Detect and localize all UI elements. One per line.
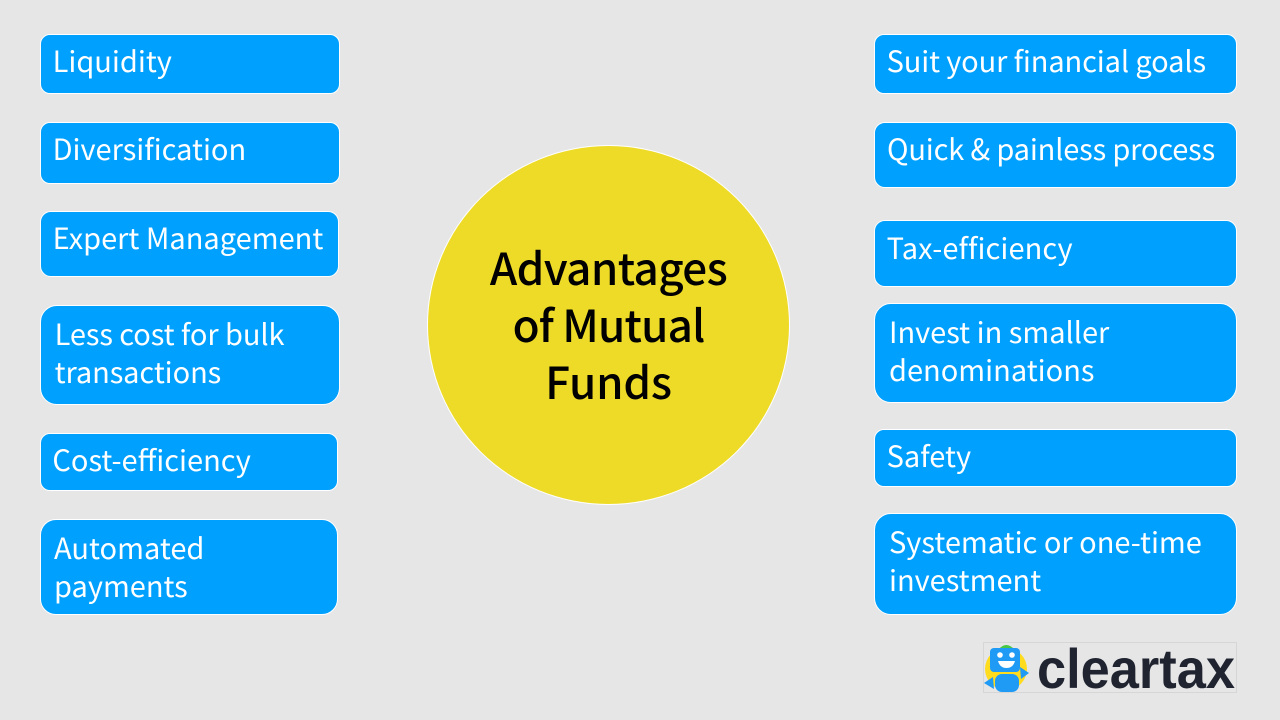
box: Automated payments [40,519,338,615]
box: Invest in smaller denominations [874,303,1237,403]
box: Systematic or one-time investment: investment [889,558,1041,600]
box: Suit your financial goals: Suit your financial goals [887,39,1206,81]
box: Less cost for bulk transactions: Less cost for bulk [55,312,284,354]
box: Quick and painless process [874,122,1237,188]
box: Automated payments: payments [54,564,188,606]
title: Funds [545,348,672,412]
box: Cost-efficiency: Cost-efficiency [52,438,251,480]
title [490,234,727,412]
title: of Mutual [513,291,704,355]
box: Diversification: Diversification [53,127,246,169]
box: Liquidity [40,34,340,94]
box: Expert Management [40,211,339,277]
box: Less cost for bulk transactions: transactions [55,350,221,392]
box: Cost-efficiency [40,433,338,491]
box: Quick and painless process: Quick & painless process [887,127,1215,169]
box: Invest in smaller denominations: denominations [889,348,1094,390]
box: Automated payments: Automated [54,526,204,568]
box: Expert Management: Expert Management [53,216,323,258]
box: Invest in smaller denominations: Invest in smaller [889,310,1109,352]
box: Systematic or one-time investment: Systematic or one-time [889,520,1202,562]
box: Liquidity: Liquidity [53,39,172,81]
box: Systematic or one-time investment [874,513,1237,615]
icon: robot [984,645,1029,692]
box: Suit your financial goals [874,34,1237,94]
box: Safety: Safety [887,434,971,476]
box: Safety [874,429,1237,487]
logo: cleartax [983,642,1237,693]
box: Diversification [40,122,340,184]
central circle [427,145,790,505]
box: Tax-efficiency [874,220,1237,287]
title: Advantages [490,234,727,298]
box: Less cost for bulk transactions [40,305,340,405]
box: Tax-efficiency: Tax-efficiency [887,226,1073,268]
